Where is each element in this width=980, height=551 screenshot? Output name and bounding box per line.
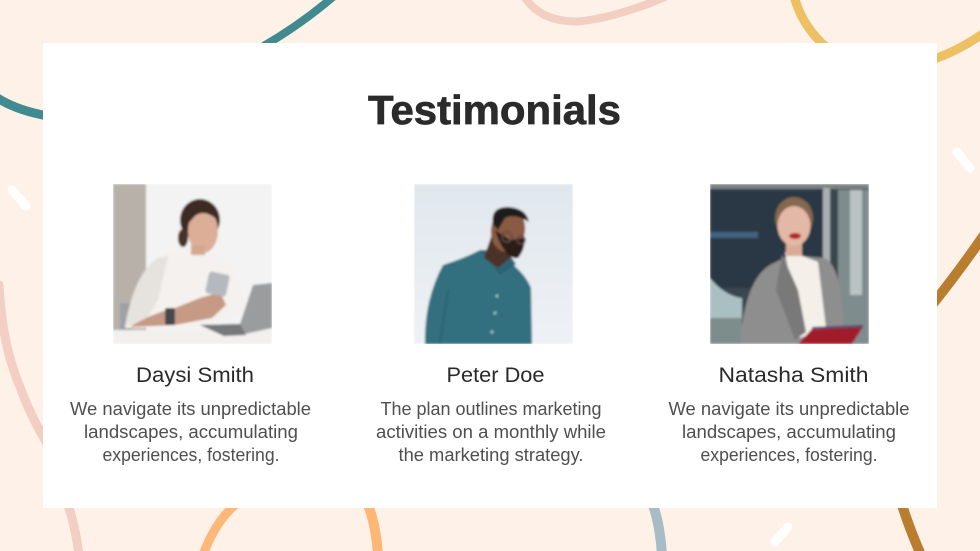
- quote: the marketing strategy.: [398, 445, 584, 465]
- photo: man in teal shirt: [414, 184, 573, 344]
- quote: experiences, fostering.: [700, 445, 878, 465]
- name: Daysi Smith: [136, 363, 254, 387]
- quote: We navigate its unpredictable: [668, 399, 910, 419]
- quote: We navigate its unpredictable: [70, 399, 311, 419]
- name: Natasha Smith: [718, 363, 868, 387]
- quote: The plan outlines marketing: [380, 399, 602, 419]
- panel: testimonial Natasha Smith: [668, 184, 910, 465]
- quote: landscapes, accumulating: [84, 422, 298, 442]
- quote: landscapes, accumulating: [682, 422, 896, 442]
- name: Peter Doe: [446, 363, 544, 387]
- panel: testimonials card: [43, 43, 937, 508]
- heading: Testimonials: [368, 87, 621, 133]
- quote: experiences, fostering.: [102, 445, 280, 465]
- photo: woman with phone and laptop: [113, 184, 272, 344]
- panel: testimonial Peter Doe: [376, 184, 606, 465]
- panel: testimonial Daysi Smith: [70, 184, 311, 465]
- quote: [70, 399, 311, 465]
- quote: activities on a monthly while: [376, 422, 606, 442]
- quote: [376, 399, 606, 465]
- photo: woman with red folder: [710, 184, 869, 344]
- quote: [668, 399, 910, 465]
